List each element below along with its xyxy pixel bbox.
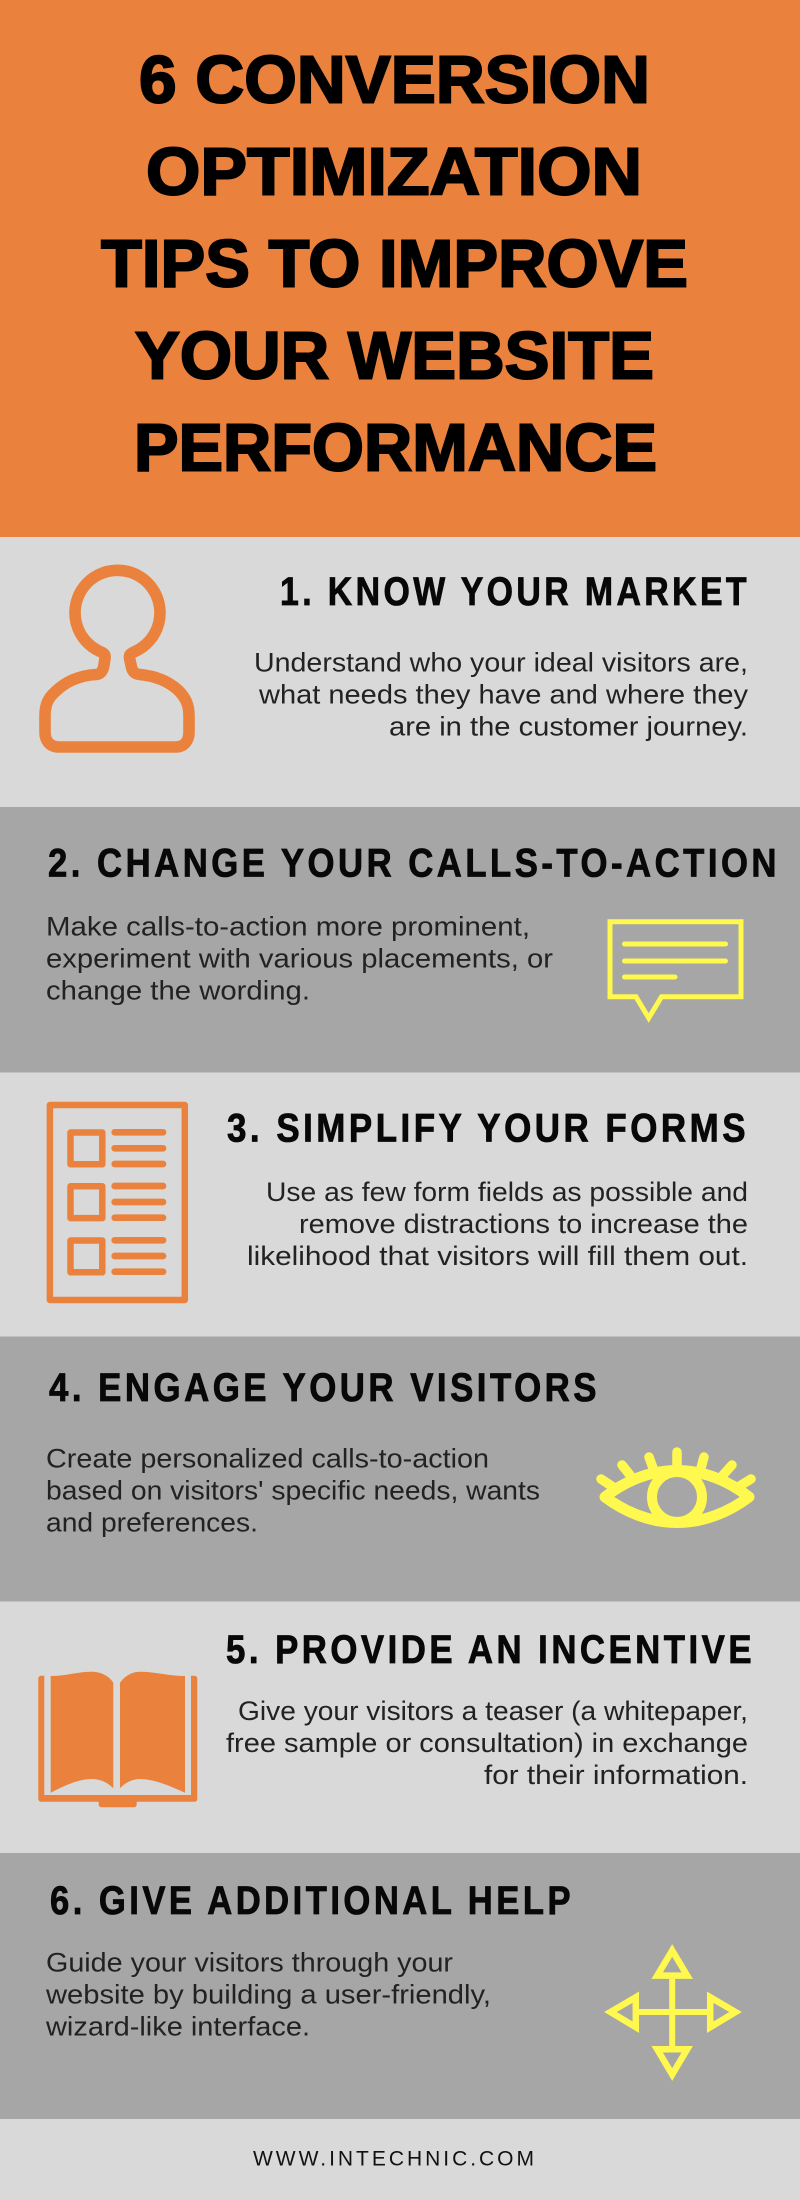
text: engage your visitors: Create personalized calls-to-action (46, 1444, 489, 1474)
title: YOUR WEBSITE (135, 320, 654, 394)
icon: eye (601, 1452, 751, 1522)
text: calls-to-action: experiment with various placements, or (46, 944, 553, 974)
text: simplify your forms: Use as few form fields as possible and (266, 1177, 748, 1207)
footer url: WWW.INTECHNIC.COM (253, 2148, 534, 2170)
text: provide an incentive: for their information. (484, 1760, 748, 1790)
text: know your market: are in the customer journey. (389, 712, 748, 742)
icon: open book (38, 1672, 197, 1807)
text: engage your visitors (46, 1444, 540, 1538)
text: give additional help (45, 1948, 491, 2042)
text: know your market: what needs they have and where they (258, 680, 749, 710)
text: know your market: Understand who your ideal visitors are, (254, 648, 748, 678)
header panel (0, 0, 800, 537)
icon: person (45, 570, 189, 747)
text: engage your visitors: based on visitors' specific needs, wants (46, 1476, 540, 1506)
text: simplify your forms: remove distractions to increase the (299, 1209, 748, 1239)
text: calls-to-action: change the wording. (46, 976, 310, 1006)
text: give additional help: website by building a user-friendly, (45, 1980, 491, 2010)
panel: tip 4 engage your visitors (0, 1336, 800, 1602)
panel: tip 3 simplify your forms (0, 1072, 800, 1336)
text: simplify your forms: likelihood that visitors will fill them out. (247, 1241, 748, 1271)
title (101, 44, 688, 486)
icon: form (50, 1105, 185, 1300)
title: TIPS TO IMPROVE (101, 228, 688, 302)
text: know your market (254, 648, 749, 742)
panel: tip 1 know your market (0, 537, 800, 807)
text: give additional help: Guide your visitors through your (46, 1948, 453, 1978)
panel: tip 2 change your calls-to-action (0, 807, 800, 1072)
title: 6 CONVERSION (139, 44, 650, 118)
title: OPTIMIZATION (146, 136, 642, 210)
icon: four-way arrows (610, 1950, 736, 2074)
text: calls-to-action: Make calls-to-action more prominent, (46, 912, 530, 942)
icon: speech bubble (610, 922, 741, 1018)
panel: tip 5 provide an incentive (0, 1602, 800, 1853)
text: calls-to-action (46, 912, 553, 1006)
panel: tip 6 give additional help (0, 1853, 800, 2119)
heading: engage your visitors: 4. ENGAGE YOUR VISITORS (49, 1366, 600, 1410)
text: provide an incentive: free sample or consultation) in exchange (226, 1728, 748, 1758)
heading: give additional help: 6. GIVE ADDITIONAL HELP (50, 1879, 574, 1923)
text: simplify your forms (247, 1177, 748, 1271)
text: provide an incentive (226, 1696, 748, 1790)
text: provide an incentive: Give your visitors a teaser (a whitepaper, (238, 1696, 748, 1726)
title: PERFORMANCE (134, 412, 657, 486)
text: engage your visitors: and preferences. (46, 1508, 258, 1538)
text: give additional help: wizard-like interface. (45, 2012, 310, 2042)
panel: footer (0, 2119, 800, 2200)
